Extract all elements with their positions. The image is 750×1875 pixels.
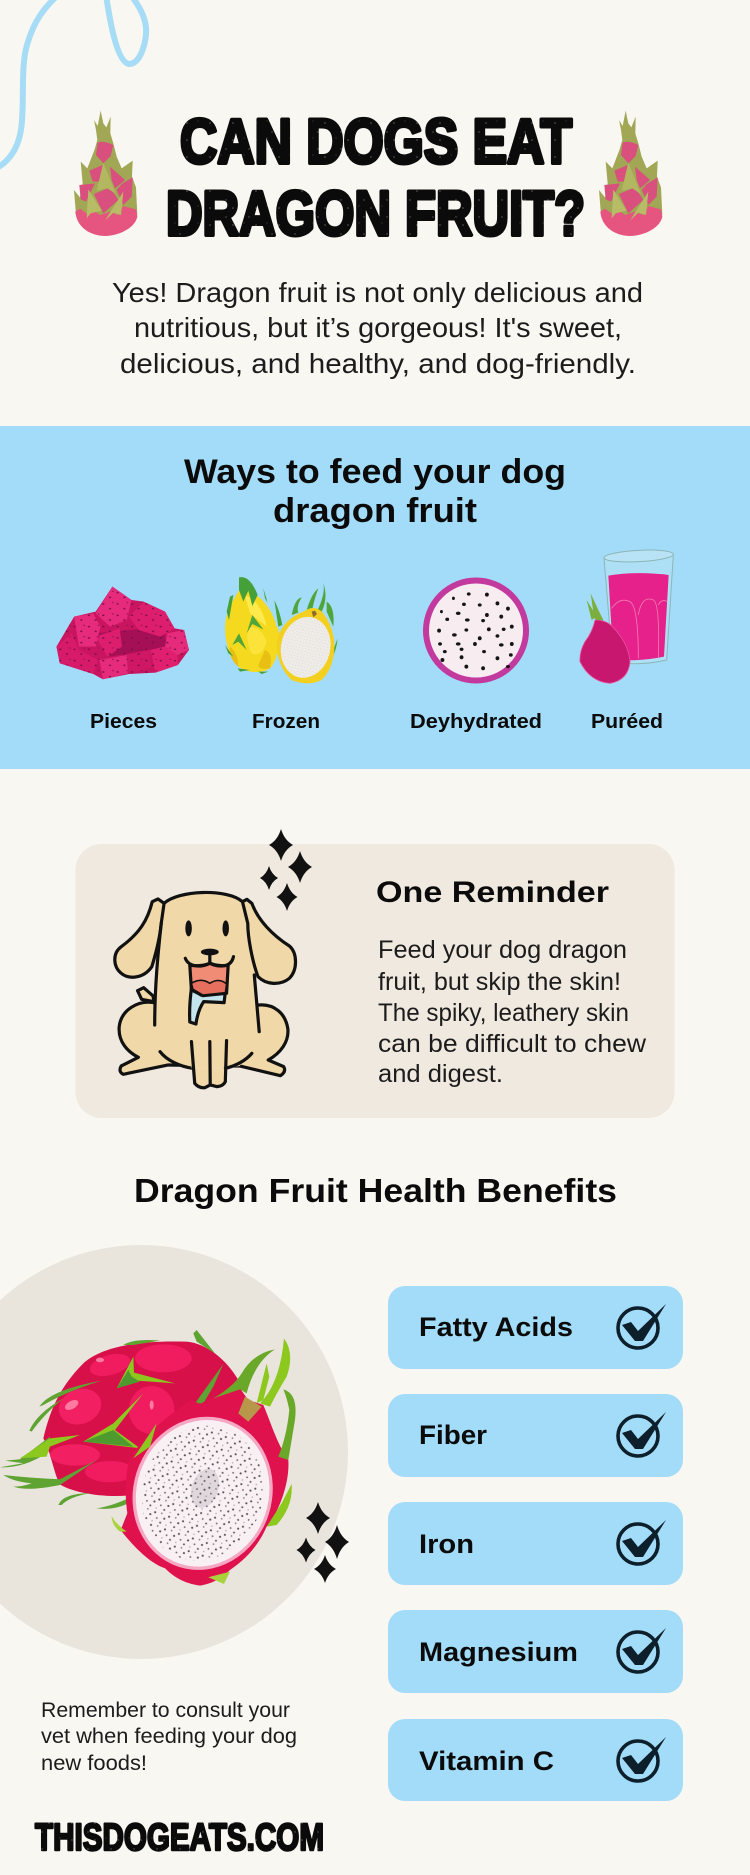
benefit: iron [388,1502,683,1585]
text block: reminder body: fruit, but skip the skin! [378,968,621,996]
halved dragon fruit [112,1338,296,1588]
benefit: fiber [388,1394,683,1477]
icon: sparkles above dog [260,829,312,911]
benefit: magnesium [388,1610,683,1693]
label: frozen: Frozen [252,711,320,733]
icon: small dragon fruit right of title [599,111,662,236]
heading: ways to feed [184,453,566,530]
text block: reminder body: and digest. [378,1060,503,1088]
intro text block: delicious, and healthy, and dog-friendly. [120,348,636,379]
panel: ways to feed your dog [0,426,750,769]
intro text block: nutritious, but it’s gorgeous! It's sweet, [134,312,622,343]
icon: puréed dragon fruit in glass with fruit [580,549,674,683]
title: CAN DOGS EAT [180,107,572,177]
icon: frozen yellow dragon fruit [225,577,338,683]
text block: reminder body: The spiky, leathery skin [378,999,629,1027]
whole dragon fruit [0,1330,238,1509]
label: dehydrated: Deyhydrated [410,711,542,733]
text block: reminder body: can be difficult to chew [378,1030,647,1058]
illustration: dragon fruit whole and halved [0,1330,296,1588]
text block: consult your vet note: vet when feeding your dog [41,1725,297,1748]
icon: check mark [618,1737,666,1781]
benefit: fiber: Fiber [419,1420,488,1450]
background circle [0,1245,348,1659]
label: pieces: Pieces [90,711,157,733]
benefit: magnesium: Magnesium [419,1637,578,1667]
seeds of dehydrated slice [437,592,514,670]
text block: reminder body [378,936,647,1088]
benefit: fatty acids [388,1286,683,1369]
icon: drooling dog [115,892,296,1088]
heading: one reminder: One Reminder [376,876,609,909]
label: puréed: Puréed [591,711,663,733]
heading: ways to feed: dragon fruit [273,492,477,530]
icon: dehydrated dragon fruit slice [426,580,526,680]
icon: check mark [618,1304,666,1348]
icon: check mark [618,1412,666,1456]
text block: consult your vet note: new foods! [41,1752,147,1775]
heading: ways to feed: Ways to feed your dog [184,453,566,491]
heading: dragon fruit health benefits: Dragon Fruit Health Benefits [134,1172,617,1209]
panel: one reminder [76,829,674,1118]
benefit: fatty acids: Fatty Acids [419,1312,573,1342]
text block: consult your vet note [41,1699,297,1775]
title: DRAGON FRUIT? [166,179,585,249]
benefit: vitamin c [388,1719,683,1801]
text block: reminder body: Feed your dog dragon [378,936,627,964]
title [165,107,587,249]
icon: check mark [618,1520,666,1564]
decorative blue squiggle line [0,0,146,168]
benefit: vitamin c: Vitamin C [419,1746,554,1776]
icon: dragon fruit pieces [56,587,189,679]
icon: check mark [618,1628,666,1672]
website footer: THISDOGEATS.COM [35,1817,324,1859]
intro text block [112,277,643,379]
intro text block: Yes! Dragon fruit is not only delicious and [112,277,643,308]
text block: consult your vet note: Remember to consult your [41,1699,290,1722]
icon: sparkles near fruit [296,1502,349,1583]
benefit: iron: Iron [419,1529,474,1559]
icon: small dragon fruit left of title [74,111,137,236]
